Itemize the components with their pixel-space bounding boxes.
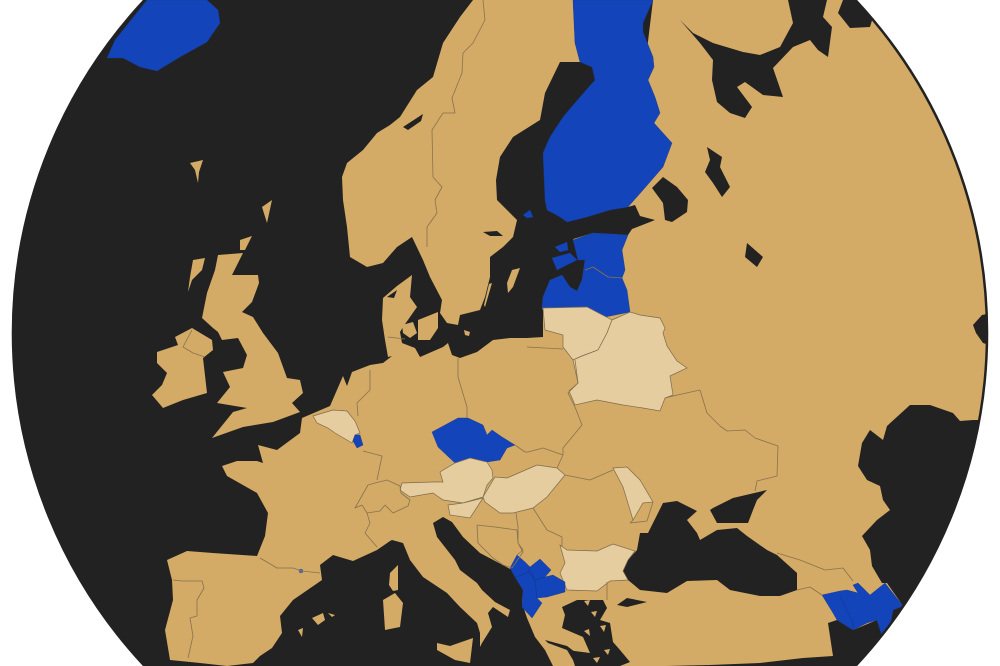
borders eastern europe (630, 390, 778, 523)
aegean islands (584, 600, 610, 663)
eastern coast water (973, 314, 986, 344)
stockholm inlet (483, 231, 503, 236)
finland (543, 0, 672, 222)
small north atlantic islands (190, 160, 272, 223)
lithuania (543, 307, 612, 360)
borders caucasus (777, 553, 853, 595)
belgium (313, 410, 360, 443)
rybinsk reservoir (745, 243, 763, 267)
western balkans group (510, 555, 565, 618)
estonian islands (552, 242, 577, 270)
slovenia (448, 498, 483, 518)
norway and sweden (342, 0, 580, 325)
gulf of corinth (545, 640, 574, 651)
luxembourg (353, 435, 363, 448)
lake ladoga (652, 177, 688, 222)
land borders (173, 0, 853, 658)
barents sea patch (838, 0, 873, 28)
white sea (680, 0, 832, 118)
azerbaijan and armenia (822, 583, 903, 636)
borders western europe (173, 337, 410, 658)
aegean sea (562, 600, 630, 666)
border norway sweden (427, 0, 485, 247)
limfjord (387, 290, 397, 298)
baltic islands (464, 268, 520, 336)
aland islands (523, 210, 533, 218)
belarus (569, 312, 687, 411)
bulgaria (560, 544, 635, 591)
borders balkans (477, 508, 607, 600)
hungary (483, 465, 565, 513)
moldova (613, 467, 653, 520)
border armenia azerbaijan (840, 596, 853, 630)
borders montenegro kosovo macedonia albania (515, 567, 545, 598)
border estonia latvia (585, 267, 622, 278)
scottish isles (188, 236, 252, 292)
trondheim fjord (403, 114, 423, 130)
borders central europe (458, 347, 613, 480)
sea of marmara (617, 598, 647, 607)
danish islands (402, 312, 438, 340)
mediterranean islands (298, 565, 473, 663)
estonia and latvia (542, 233, 630, 317)
austria (400, 458, 493, 503)
black sea (623, 501, 797, 596)
andorra (299, 569, 303, 573)
ireland (152, 328, 213, 408)
sea of azov (710, 490, 767, 523)
gulf of riga (550, 238, 585, 291)
border ireland (183, 330, 205, 357)
iceland (107, 0, 220, 71)
lake onega (705, 147, 730, 197)
czech republic (432, 418, 515, 463)
great britain (202, 253, 303, 438)
